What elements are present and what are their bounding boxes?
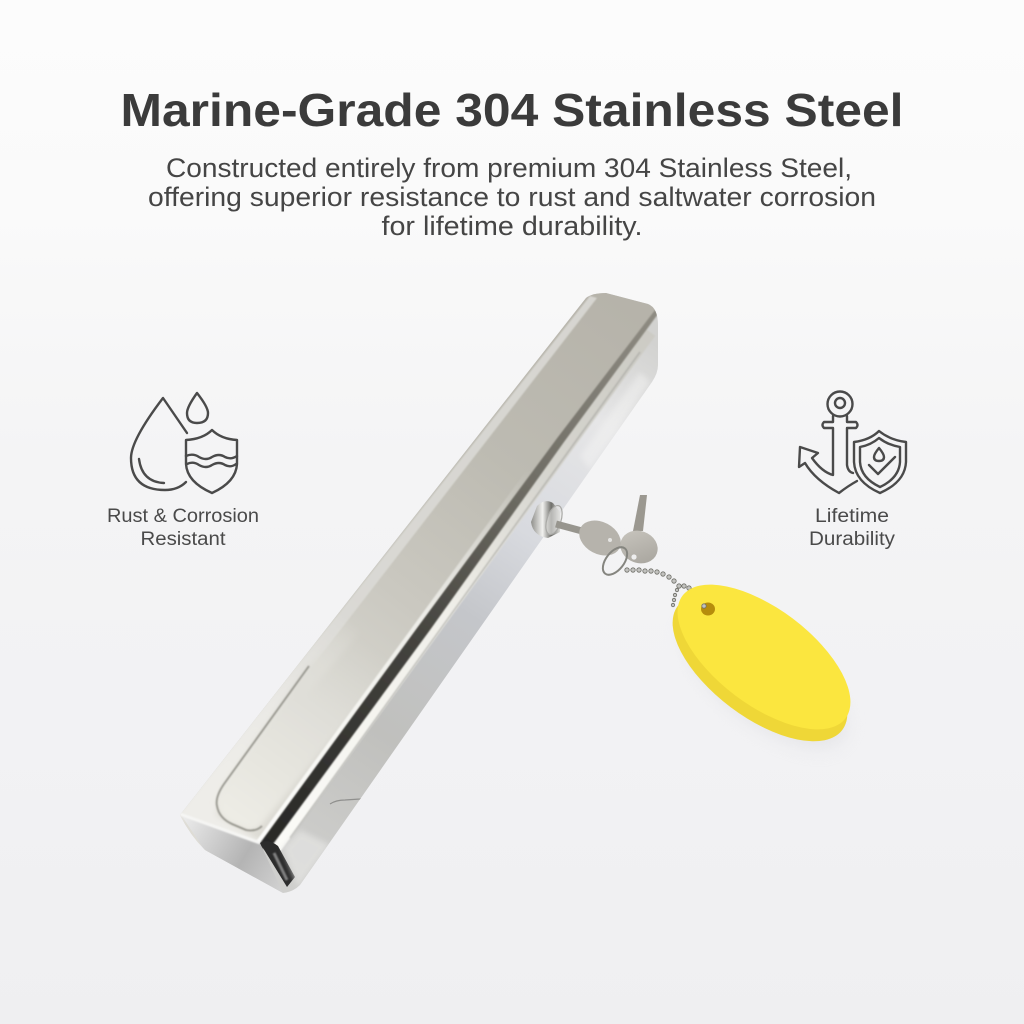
label: rust and corrosion resistant: Resistant bbox=[140, 529, 226, 550]
title: Marine-Grade 304 Stainless Steel bbox=[120, 84, 904, 136]
bright silver band around panel bbox=[181, 650, 310, 840]
white strip beside groove bbox=[257, 491, 514, 842]
chain end bbox=[702, 604, 706, 608]
upper side sheen bbox=[587, 376, 646, 460]
outer shield bbox=[854, 431, 906, 493]
label: lifetime durability: Lifetime bbox=[815, 506, 889, 527]
band edge line bbox=[290, 352, 640, 838]
left bevel highlight bbox=[322, 296, 597, 642]
bar side face bbox=[170, 285, 670, 900]
shield check bbox=[869, 457, 895, 474]
groove dark line bbox=[258, 310, 658, 851]
end cap edge highlight bbox=[180, 814, 260, 843]
lock face ring bbox=[543, 504, 565, 536]
label: lifetime durability: Durability bbox=[809, 529, 896, 550]
lower side light bbox=[283, 830, 330, 887]
key ring bbox=[598, 543, 632, 579]
side seam bbox=[330, 798, 361, 804]
end cap bbox=[184, 818, 276, 890]
shield waves bbox=[186, 455, 237, 459]
label: rust and corrosion resistant: Rust & Corrosion bbox=[107, 506, 259, 527]
product: stainless steel bar bbox=[170, 285, 670, 900]
fob face bbox=[654, 557, 874, 757]
lock cylinder bbox=[531, 501, 560, 538]
key hole bbox=[631, 554, 637, 560]
anchor ring bbox=[828, 392, 852, 416]
label: lifetime durability bbox=[809, 506, 896, 550]
product: ball chain bbox=[625, 568, 702, 607]
small drop bbox=[187, 393, 208, 423]
front key head bbox=[573, 514, 627, 562]
description text bbox=[148, 153, 876, 241]
bar top face bbox=[170, 285, 664, 860]
fob side bbox=[648, 567, 872, 769]
anchor shank and bar bbox=[799, 416, 857, 493]
description text: offering superior resistance to rust and saltwater corrosion bbox=[148, 182, 876, 212]
notch highlight bbox=[274, 853, 287, 880]
fob hole bbox=[701, 602, 715, 616]
inner shield bbox=[860, 438, 900, 487]
drop inner arc bbox=[139, 459, 164, 483]
icon: anchor and shield bbox=[799, 392, 906, 493]
large drop bbox=[131, 398, 187, 490]
icon: water drops and shield bbox=[131, 393, 237, 493]
rear key head bbox=[616, 525, 662, 569]
rear key blade bbox=[633, 495, 647, 531]
description text: for lifetime durability. bbox=[382, 211, 642, 241]
label: rust and corrosion resistant bbox=[107, 506, 259, 550]
product: yellow float keychain bbox=[648, 557, 874, 774]
description text: Constructed entirely from premium 304 Stainless Steel, bbox=[166, 153, 852, 183]
groove highlight band bbox=[272, 332, 650, 852]
shield drop bbox=[874, 448, 884, 461]
product: lock and keys bbox=[531, 495, 662, 579]
shield bbox=[186, 430, 237, 493]
fob shadow bbox=[660, 586, 870, 774]
recessed panel bbox=[220, 692, 342, 829]
end groove notch bbox=[260, 841, 295, 887]
key shaft bbox=[556, 524, 582, 531]
panel shadow line bbox=[217, 666, 309, 830]
